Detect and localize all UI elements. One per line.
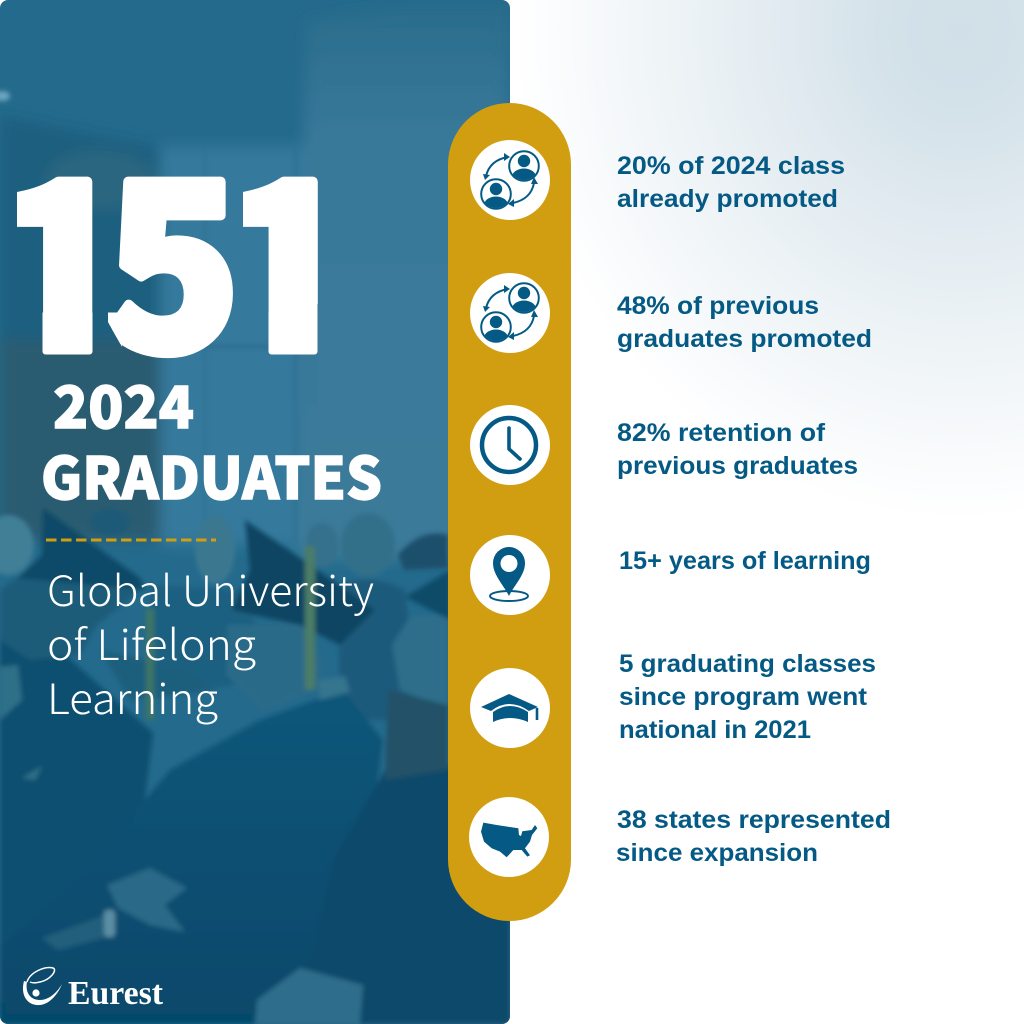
stat: 48% of previous graduates promoted: 48% of previous (617, 292, 819, 320)
stat: 38 states represented since expansion: since expansion (616, 839, 818, 867)
stat: 82% retention of previous graduates: previous graduates (617, 452, 858, 480)
stat: 82% retention of previous graduates (617, 419, 858, 480)
stat: 5 graduating classes since program went national in 2021: national in 2021 (619, 716, 811, 744)
subtitle: Global University of Lifelong Learning: Global University (47, 558, 374, 619)
dashed divider (46, 538, 216, 542)
logo: Eurest (23, 968, 164, 1012)
icon: people exchange (previous graduates) (470, 273, 550, 353)
stat: 20% of 2024 class already promoted: 20% of 2024 class (617, 152, 845, 180)
stat: 38 states represented since expansion (616, 806, 891, 867)
stat: 5 graduating classes since program went national in 2021 (619, 650, 876, 744)
panel: gold icon pill (448, 103, 571, 921)
stat: 20% of 2024 class already promoted: already promoted (617, 185, 838, 213)
heading 2024: 2024 (53, 361, 194, 445)
centre graduate (0, 520, 383, 1024)
heading GRADUATES: GRADUATES (41, 432, 382, 516)
stat: 38 states represented since expansion: 38 states represented (617, 806, 891, 834)
subtitle: Global University of Lifelong Learning (47, 558, 374, 727)
right graduate (255, 570, 510, 1024)
stat: 82% retention of previous graduates: 82% retention of (617, 419, 826, 447)
panel: graduation photo (0, 0, 510, 1024)
subtitle: Global University of Lifelong Learning: Learning (47, 666, 218, 727)
left graduate (0, 508, 153, 950)
stat: 20% of 2024 class already promoted (617, 152, 845, 213)
icon: USA map (469, 797, 549, 877)
icon: map pin (470, 535, 550, 615)
stat: 5 graduating classes since program went national in 2021: since program went (619, 683, 868, 711)
icon: people exchange (promoted 2024) (470, 140, 550, 220)
back row audience (0, 509, 448, 720)
icon: clock (470, 405, 550, 485)
stat: 48% of previous graduates promoted: graduates promoted (617, 325, 872, 353)
logo: Eurest: Eurest (68, 975, 164, 1012)
stat: 15+ years of learning: 15+ years of learning (619, 547, 871, 575)
stat: 48% of previous graduates promoted (617, 292, 872, 353)
subtitle: Global University of Lifelong Learning: of Lifelong (47, 612, 256, 673)
stat: 5 graduating classes since program went national in 2021: 5 graduating classes (619, 650, 876, 678)
icon: graduation cap (470, 668, 550, 748)
big number 151: 151 (0, 88, 356, 416)
